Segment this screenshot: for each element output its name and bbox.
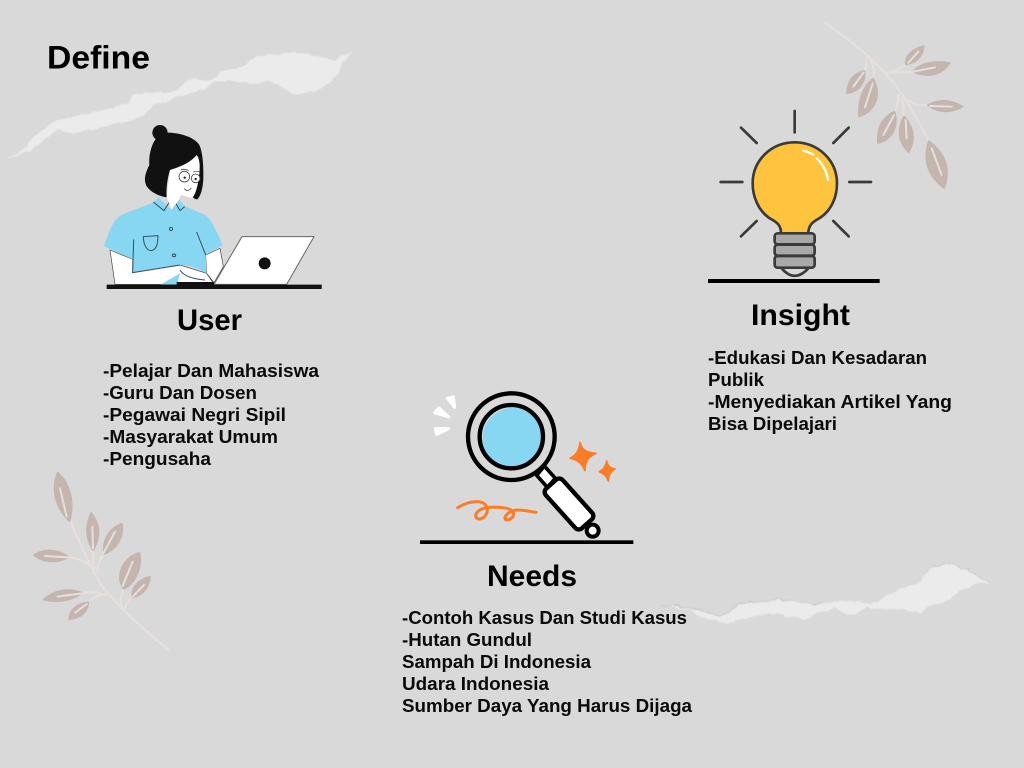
baseline [420,540,633,544]
left arm and torso skin [110,250,214,284]
baseline [708,279,880,283]
illustration: light bulb [708,111,880,283]
text block: insight list: -Edukasi Dan Kesadaran [708,348,927,368]
laptop logo [259,257,271,269]
torn paper strip: bottom right [660,563,990,623]
bottom cap [782,268,808,276]
white ticks [435,397,455,434]
heading: insight: Insight [751,299,850,332]
pupils [183,176,197,180]
text block: user list: -Pengusaha [103,449,212,469]
text block: needs list: Udara Indonesia [402,674,550,694]
text block: user list: -Masyarakat Umum [103,427,278,447]
glass [753,142,837,233]
hair [145,133,203,199]
desk [107,282,322,289]
illustration: user with laptop [104,125,322,289]
shirt details [133,202,206,280]
illustration: magnifying glass [420,393,633,544]
torn paper strip: top left [5,51,352,160]
text block: needs list: Sumber Daya Yang Harus Dijaga [402,696,693,716]
shirt [104,197,223,273]
screw base [775,233,815,268]
lens rims [468,393,555,480]
handle cap [587,525,599,537]
text block: user list [103,361,320,469]
lens [483,408,544,469]
glasses and face details [179,169,200,191]
blue shirt hem [161,273,180,284]
text block: insight list: Publik [708,370,765,390]
text block: user list: -Pelajar Dan Mahasiswa [103,361,320,381]
laptop [214,237,314,284]
title: Define [47,40,150,76]
leaf branch: top right [825,23,964,189]
text block: needs list: Sampah Di Indonesia [402,652,592,672]
text block: insight list [708,348,952,434]
face [167,155,200,209]
highlights [803,151,828,180]
heading: needs: Needs [487,560,577,593]
handle neck [537,466,555,487]
handle grip [543,477,595,531]
text block: needs list: -Contoh Kasus Dan Studi Kasus [402,608,687,628]
orange sparkles [570,442,615,481]
text block: user list: -Guru Dan Dosen [103,383,257,403]
hair bun [152,125,168,140]
text block: needs list [402,608,693,716]
text block: insight list: Bisa Dipelajari [708,414,837,434]
heading: user: User [177,304,242,337]
right arm [206,248,223,283]
text block: insight list: -Menyediakan Artikel Yang [708,392,952,412]
rays [721,111,871,236]
leaf branch: bottom left [33,472,168,650]
orange squiggle [458,502,536,520]
text block: needs list: -Hutan Gundul [402,630,532,650]
text block: user list: -Pegawai Negri Sipil [103,405,286,425]
